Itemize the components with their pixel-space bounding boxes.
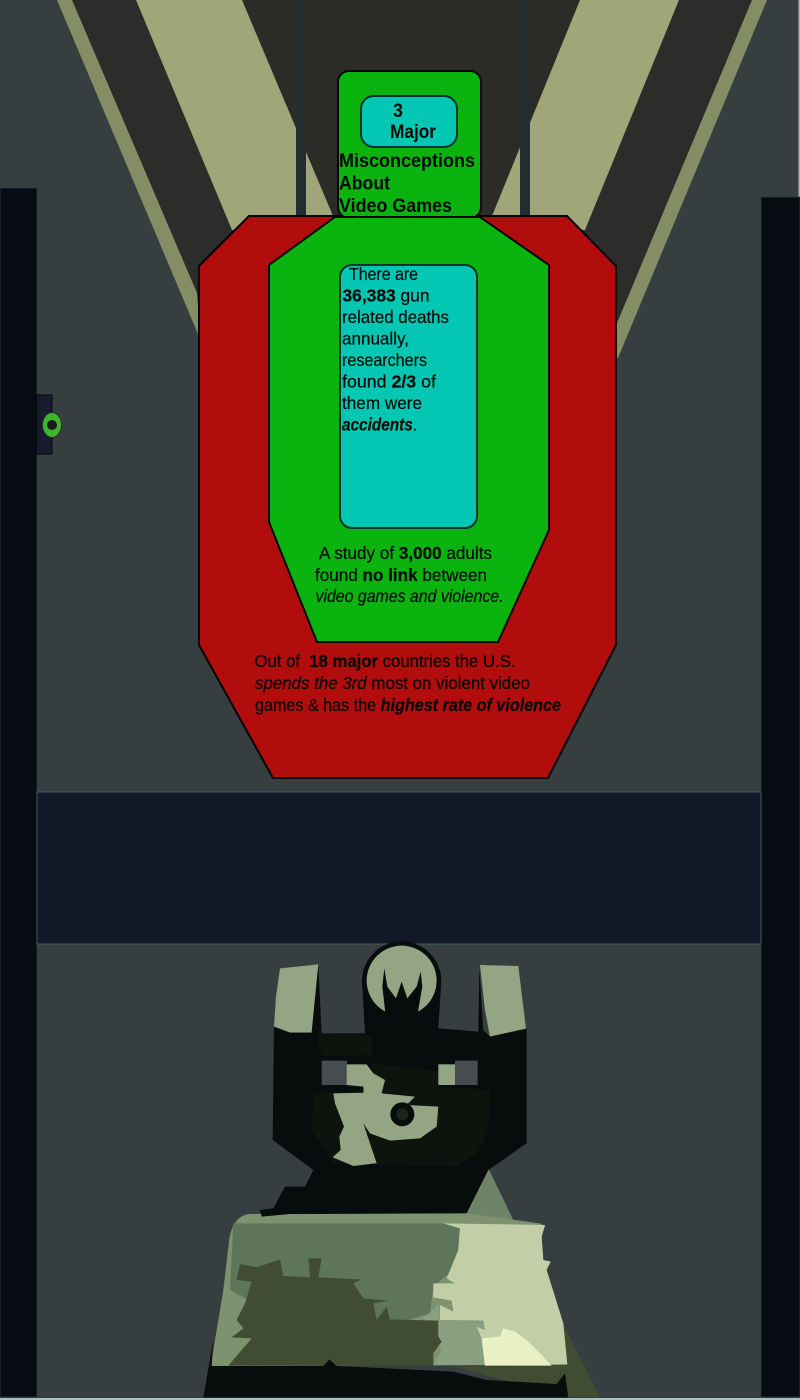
target: cyan head plate — [361, 96, 457, 147]
text block: gun deaths fact: found 2/3 of — [342, 372, 436, 392]
text block: gun deaths fact: related deaths — [342, 307, 449, 327]
title: 3 — [393, 101, 403, 122]
text block: countries spending fact: spends the 3rd most on violent video — [255, 673, 530, 693]
text block: study of adults fact: video games and violence. — [316, 586, 504, 606]
text block: study of adults fact — [315, 543, 504, 606]
text block: gun deaths fact: accidents. — [342, 414, 417, 434]
text block: countries spending fact — [254, 651, 561, 715]
title: Misconceptions — [339, 151, 475, 172]
left side post — [0, 188, 37, 1397]
target support poles — [296, 0, 530, 217]
target: cyan torso plate — [340, 265, 477, 528]
sight post support triangle — [463, 1168, 513, 1220]
title: Video Games — [339, 196, 452, 217]
text block: study of adults fact: found no link between — [315, 565, 487, 585]
target: red outer silhouette — [199, 216, 616, 778]
rear sight silhouette — [260, 941, 527, 1217]
text block: gun deaths fact: 36,383 gun — [342, 286, 430, 306]
right side post — [761, 197, 800, 1397]
title: Major — [390, 122, 437, 143]
text block: gun deaths fact: There are — [349, 264, 418, 284]
title: About — [339, 174, 391, 194]
text block: countries spending fact: games & has the highest rate of violence — [255, 695, 561, 715]
text block: study of adults fact: A study of 3,000 adults — [319, 543, 492, 563]
title — [339, 101, 475, 217]
text block: gun deaths fact: them were — [342, 393, 422, 413]
gun barrel housing — [203, 1213, 600, 1397]
text block: gun deaths fact — [342, 264, 449, 434]
text block: gun deaths fact: researchers — [342, 350, 427, 370]
horizontal dark band — [37, 792, 761, 944]
gun front sight — [203, 941, 600, 1397]
light beams behind the target — [57, 0, 767, 600]
icon: green sensor on left post — [36, 395, 62, 454]
text block: gun deaths fact: annually, — [342, 328, 409, 348]
target: green inner torso — [269, 217, 549, 642]
text block: countries spending fact: Out of 18 major countries the U.S. — [254, 651, 516, 671]
target: green head — [338, 71, 481, 218]
